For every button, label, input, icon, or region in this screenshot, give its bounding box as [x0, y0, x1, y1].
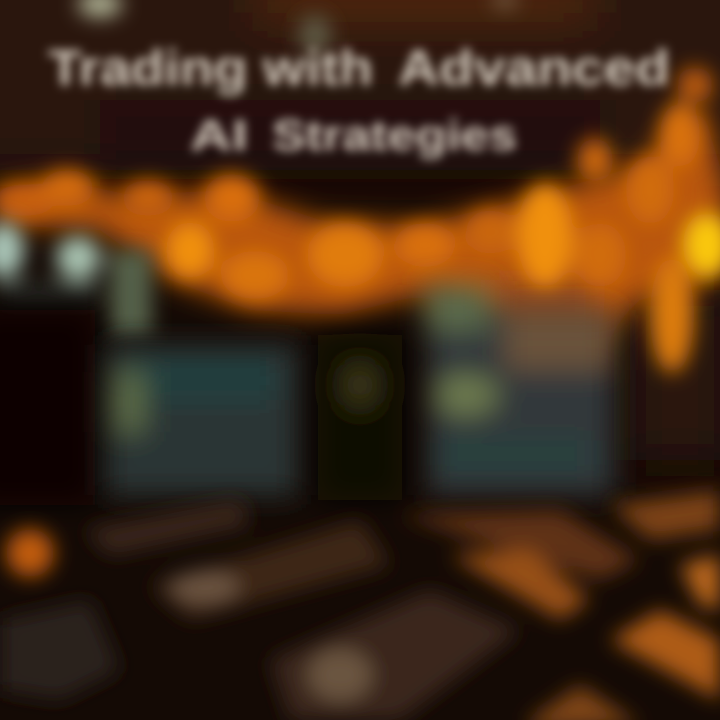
left dark edge	[0, 310, 95, 505]
band haze	[0, 100, 720, 365]
bright yellow light	[683, 213, 720, 277]
keyboards and desk	[0, 490, 720, 720]
upper wall glow	[0, 0, 720, 460]
left pale lights	[0, 222, 152, 335]
title: AI	[190, 111, 248, 160]
title: Advanced	[398, 40, 670, 96]
orange chart glow band	[0, 67, 720, 373]
monitor: left	[106, 345, 298, 495]
background top lights	[78, 0, 517, 55]
chart line peaks	[0, 67, 713, 373]
monitor: right	[425, 285, 614, 495]
title: Trading with	[48, 40, 373, 96]
centre dark stand	[318, 335, 402, 500]
icon: orange desk light	[6, 529, 54, 577]
title: Strategies	[272, 111, 517, 160]
title	[48, 40, 670, 160]
